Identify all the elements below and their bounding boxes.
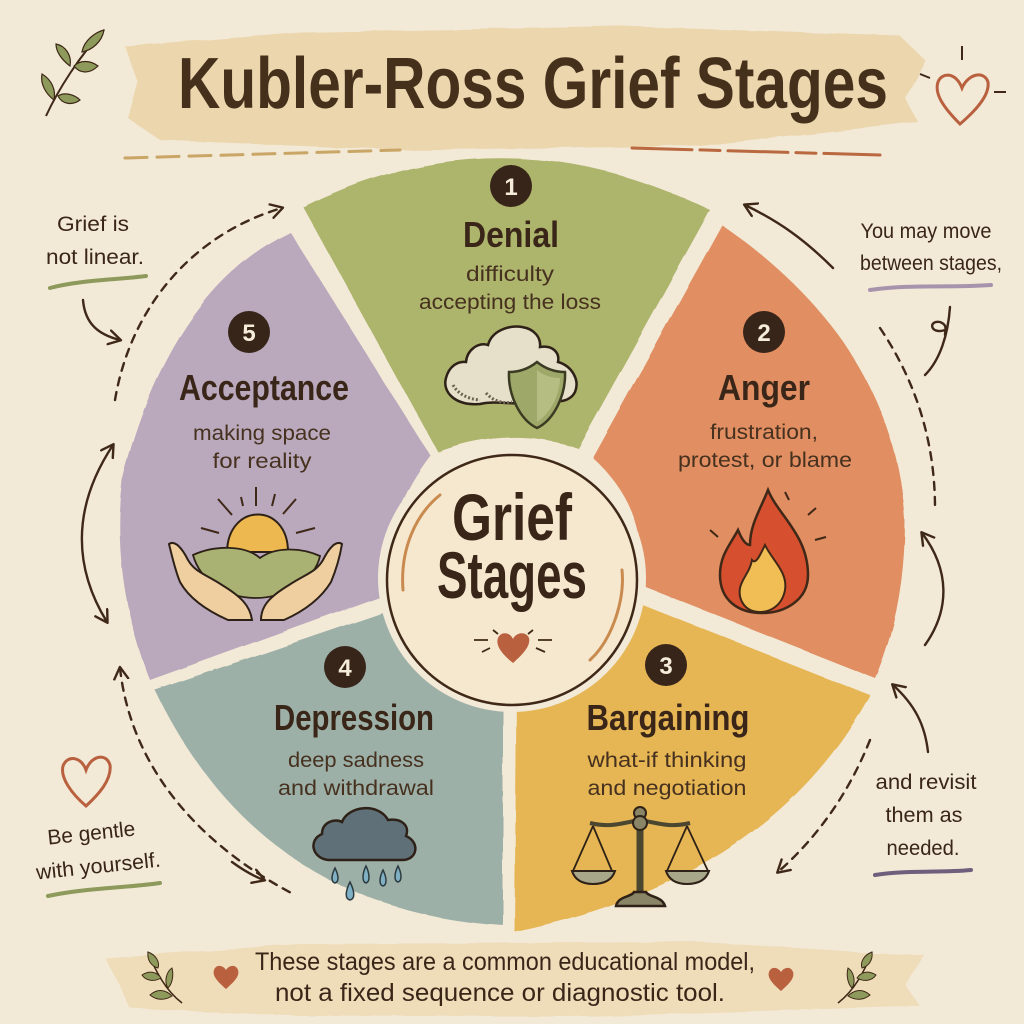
center title: Stages: [437, 538, 587, 612]
note: you may move between stages: [860, 220, 1002, 290]
number badge 5: [228, 311, 270, 353]
note: and revisit them as needed: them as: [886, 804, 962, 827]
panel: bargaining: [515, 602, 870, 932]
center circle: [378, 444, 646, 712]
panel: denial: [303, 158, 710, 452]
icon: footer hearts: [214, 966, 793, 991]
heading: Anger: [718, 367, 810, 408]
icon: footer leaf sprigs: [142, 952, 876, 1003]
number badge 2: [743, 311, 785, 353]
arrows: cycle around the wheel: [82, 205, 950, 895]
footer note: [255, 948, 755, 1007]
description: making space: [193, 422, 331, 445]
note: grief is not linear: not linear.: [46, 246, 144, 269]
icon: cloud and shield: [445, 327, 576, 428]
panel: acceptance: [119, 232, 430, 680]
panel: anger: [593, 225, 905, 678]
number badge 2: 2: [757, 320, 771, 347]
note: you may move between stages: You may move: [860, 220, 992, 243]
number badge 4: 4: [338, 655, 352, 682]
center title: [437, 480, 587, 612]
footer note: not a fixed sequence or diagnostic tool.: [275, 979, 725, 1007]
description: for reality: [212, 450, 312, 473]
center title: Grief: [452, 480, 573, 554]
icon: rain cloud: [313, 808, 415, 900]
heading: Bargaining: [586, 697, 750, 738]
description: protest, or blame: [678, 449, 852, 472]
number badge 1: [490, 165, 532, 207]
description: [419, 263, 601, 314]
title banner: [125, 26, 925, 150]
note: and revisit them as needed: [875, 771, 977, 875]
description: [193, 422, 331, 473]
note: be gentle with yourself: [34, 757, 162, 896]
note: be gentle with yourself: Be gentle: [46, 817, 136, 850]
icon: balance scales: [572, 807, 709, 906]
icon: sun over hills in hands: [169, 487, 342, 620]
description: and negotiation: [588, 777, 746, 800]
note: grief is not linear: [46, 213, 146, 288]
heading: Depression: [274, 697, 434, 738]
number badge 5: 5: [242, 320, 256, 347]
heading: Denial: [463, 214, 559, 255]
panel: depression: [155, 610, 503, 925]
note: you may move between stages: between stages,: [860, 252, 1002, 275]
number badge 3: 3: [659, 653, 673, 680]
icon: flame: [710, 490, 826, 613]
number badge 4: [324, 646, 366, 688]
footer note: These stages are a common educational model,: [255, 948, 755, 976]
description: deep sadness: [288, 749, 424, 772]
note: and revisit them as needed: and revisit: [876, 771, 977, 794]
number badge 3: [645, 644, 687, 686]
heading: Acceptance: [179, 367, 349, 408]
note: and revisit them as needed: needed.: [886, 837, 960, 860]
description: [278, 749, 434, 800]
number badge 1: 1: [504, 174, 518, 201]
banner underline strokes: [125, 148, 880, 158]
footer band: [105, 942, 925, 1016]
note: grief is not linear: Grief is: [57, 213, 129, 236]
icon: center heart: [474, 630, 552, 663]
icon: heart top right: [920, 46, 1006, 124]
description: accepting the loss: [419, 291, 601, 314]
icon: leaf sprig top left: [42, 30, 104, 116]
description: difficulty: [466, 263, 555, 286]
description: frustration,: [710, 421, 818, 444]
description: what-if thinking: [586, 749, 746, 772]
description: and withdrawal: [278, 777, 434, 800]
description: [678, 421, 852, 472]
description: [586, 749, 746, 800]
note: be gentle with yourself: with yourself.: [34, 849, 162, 885]
